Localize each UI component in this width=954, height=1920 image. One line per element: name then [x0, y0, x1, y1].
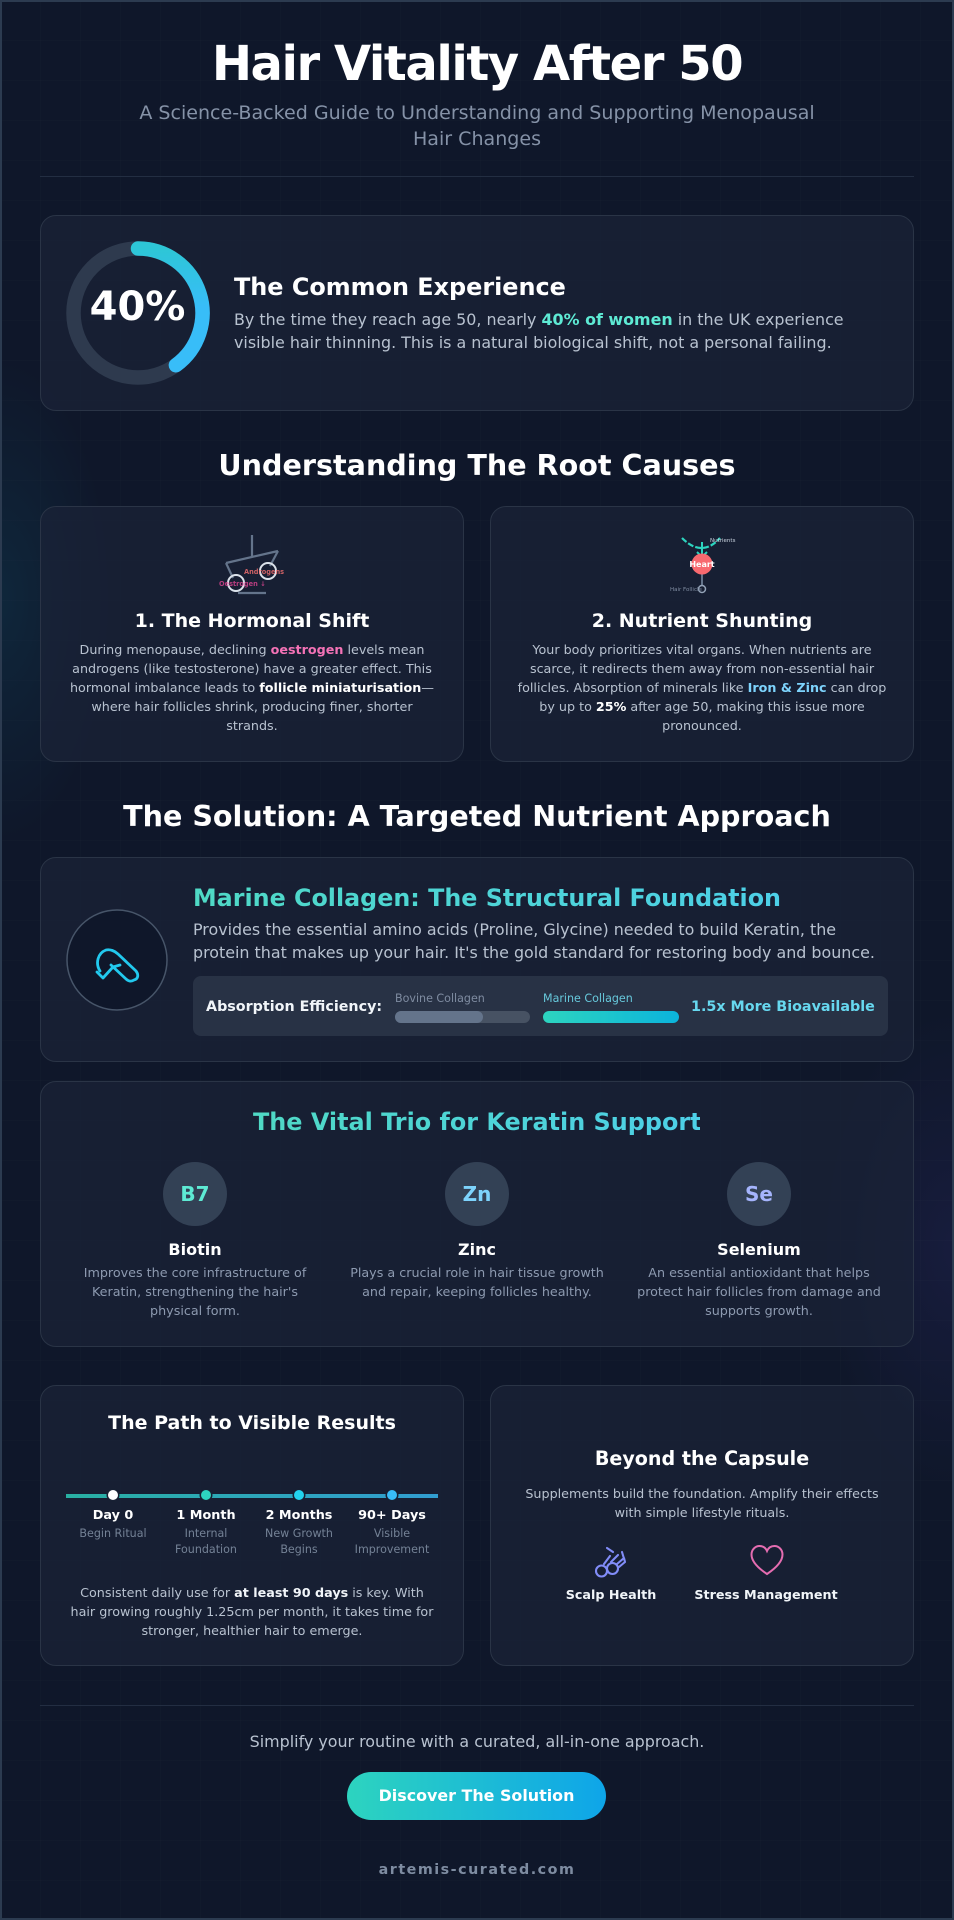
icon: nutrient flow: Heart [689, 560, 715, 569]
button: discover [347, 1772, 606, 1820]
bioavailable callout: 1.5x More Bioavailable [691, 999, 875, 1015]
text: marine collagen: protein that makes up your hair. It's the gold standard for restoring body and bounce. [193, 943, 875, 962]
icon: nutrient flow: Nutrients [710, 538, 736, 544]
heading: beyond the capsule: Beyond the Capsule [595, 1447, 809, 1470]
chart: absorption efficiency [193, 976, 888, 1036]
icon: B7 [163, 1162, 227, 1226]
footer url: artemis-curated.com [379, 1862, 575, 1878]
panel: beyond the capsule [490, 1385, 914, 1666]
milestone: 90+ days: 90+ Days [358, 1508, 426, 1523]
text: common experience: By the time they reach age 50, nearly 40% of women in the UK experience [234, 310, 844, 329]
text: zinc [350, 1265, 604, 1299]
icon: Se: Se [745, 1182, 773, 1206]
text: nutrient shunting: scarce, it redirects them away from non-essential hair [530, 661, 874, 676]
text: selenium: An essential antioxidant that helps [648, 1265, 870, 1280]
text: common experience: visible hair thinning. This is a natural biological shift, not a personal failing. [234, 333, 832, 352]
label: stress management: Stress Management [694, 1587, 838, 1602]
text: biotin [84, 1265, 307, 1318]
button: discover: Discover The Solution [379, 1786, 574, 1805]
title: Hair Vitality After 50 [212, 36, 742, 92]
heading: common experience: The Common Experience [234, 273, 566, 301]
icon: Se [727, 1162, 791, 1226]
icon: scalp health [594, 1546, 626, 1578]
name: zinc: Zinc [458, 1240, 496, 1259]
milestone: day 0: Begin Ritual [79, 1527, 147, 1540]
milestone: 1 month: 1 Month [176, 1508, 236, 1523]
text: selenium: protect hair follicles from damage and [637, 1284, 881, 1299]
text: zinc: Plays a crucial role in hair tissue growth [350, 1265, 604, 1280]
text: hormonal shift: where hair follicles shrink, producing finer, shorter [91, 699, 413, 714]
icon: nutrient flow: Hair Follicle [670, 587, 703, 593]
panel: path to results [40, 1385, 464, 1666]
label: scalp health: Scalp Health [566, 1587, 656, 1602]
text: hormonal shift: strands. [226, 718, 278, 733]
panel: nutrient shunting [490, 506, 914, 762]
milestone: day 0 [79, 1508, 147, 1540]
donut value: 40% [90, 284, 185, 330]
subtitle: A Science-Backed Guide to Understanding and Supporting Menopausal [139, 102, 815, 124]
text: selenium: supports growth. [705, 1303, 813, 1318]
chart: 40% donut [66, 241, 210, 385]
panel: common experience [40, 215, 914, 411]
panel: vital trio [40, 1081, 914, 1347]
chart: timeline [66, 1494, 438, 1498]
text: call to action: Simplify your routine with a curated, all-in-one approach. [250, 1732, 704, 1751]
timeline dot: 1 month [200, 1490, 210, 1500]
icon: Zn: Zn [463, 1182, 491, 1206]
icon: hormone scale: Androgens [244, 568, 284, 576]
heading: nutrient shunting: 2. Nutrient Shunting [592, 610, 812, 632]
heading: solution: The Solution: A Targeted Nutrient Approach [123, 799, 831, 833]
text: common experience [234, 310, 844, 352]
icon: collagen circle [66, 909, 168, 1011]
bovine bar [395, 1011, 530, 1023]
text: biotin: physical form. [150, 1303, 240, 1318]
text: nutrient shunting: by up to 25% after age 50, making this issue more [539, 699, 865, 714]
text: nutrient shunting: Your body prioritizes vital organs. When nutrients are [532, 642, 872, 657]
text: nutrient shunting: follicles. Absorption of minerals like Iron & Zinc can drop [518, 680, 886, 695]
text: marine collagen [193, 920, 875, 962]
heading: vital trio: The Vital Trio for Keratin Support [253, 1108, 702, 1136]
marine label: Marine Collagen [543, 992, 633, 1005]
text: results note [71, 1585, 434, 1638]
milestone: 2 months: New Growth [265, 1527, 333, 1540]
icon: B7: B7 [180, 1182, 210, 1206]
text: results note: stronger, healthier hair to emerge. [142, 1623, 362, 1638]
bovine label: Bovine Collagen [395, 992, 485, 1005]
text: hormonal shift: hormonal imbalance leads to follicle miniaturisation— [70, 680, 434, 695]
text: biotin: Keratin, strengthening the hair's [92, 1284, 298, 1299]
milestone: 90+ days: Improvement [355, 1543, 429, 1556]
text: biotin: Improves the core infrastructure of [84, 1265, 306, 1280]
milestone: day 0: Day 0 [93, 1508, 133, 1523]
text: hormonal shift [70, 642, 434, 733]
heading: path to results: The Path to Visible Results [108, 1412, 396, 1434]
panel: hormonal shift [40, 506, 464, 762]
name: selenium: Selenium [717, 1240, 801, 1259]
text: results note: Consistent daily use for at least 90 days is key. With [80, 1585, 424, 1600]
text: nutrient shunting [518, 642, 886, 733]
text: beyond the capsule: Supplements build the foundation. Amplify their effects [525, 1486, 879, 1501]
milestone: 2 months: Begins [280, 1543, 318, 1556]
subtitle: Hair Changes [413, 128, 541, 150]
subtitle [139, 102, 815, 150]
text: hormonal shift: During menopause, declining oestrogen levels mean [80, 642, 424, 657]
heading: hormonal shift: 1. The Hormonal Shift [135, 610, 369, 632]
absorption label: Absorption Efficiency: [206, 999, 382, 1015]
text: results note: hair growing roughly 1.25cm per month, it takes time for [71, 1604, 433, 1619]
marine bar [543, 1011, 679, 1023]
timeline dot: day 0 [108, 1490, 118, 1500]
milestone: 1 month: Internal [185, 1527, 227, 1540]
heading: marine collagen: Marine Collagen: The Structural Foundation [193, 884, 781, 912]
text: nutrient shunting: pronounced. [662, 718, 742, 733]
milestone: 90+ days: Visible [374, 1527, 410, 1540]
panel: marine collagen [40, 857, 914, 1062]
heading: root causes: Understanding The Root Causes [218, 448, 736, 482]
timeline dot: 90+ days [386, 1490, 396, 1500]
text: beyond the capsule [525, 1486, 879, 1520]
icon: hormone scale [219, 535, 284, 594]
icon: nutrient flow [670, 537, 736, 594]
icon: heart [750, 1545, 784, 1576]
icon: hormone scale: Oestrogen ↓ [219, 580, 266, 588]
milestone: 1 month [175, 1508, 237, 1556]
icon: Zn [445, 1162, 509, 1226]
milestone: 2 months: 2 Months [266, 1508, 332, 1523]
text: zinc: and repair, keeping follicles healthy. [362, 1284, 592, 1299]
text: hormonal shift: androgens (like testosterone) have a greater effect. This [72, 661, 432, 676]
milestone: 2 months [265, 1508, 333, 1556]
text: marine collagen: Provides the essential amino acids (Proline, Glycine) needed to build Keratin, the [193, 920, 836, 939]
milestone: 90+ days [355, 1508, 430, 1556]
milestone: 1 month: Foundation [175, 1543, 237, 1556]
text: selenium [637, 1265, 881, 1318]
text: beyond the capsule: with simple lifestyle rituals. [615, 1505, 789, 1520]
name: biotin: Biotin [168, 1240, 222, 1259]
timeline dot: 2 months [294, 1490, 304, 1500]
